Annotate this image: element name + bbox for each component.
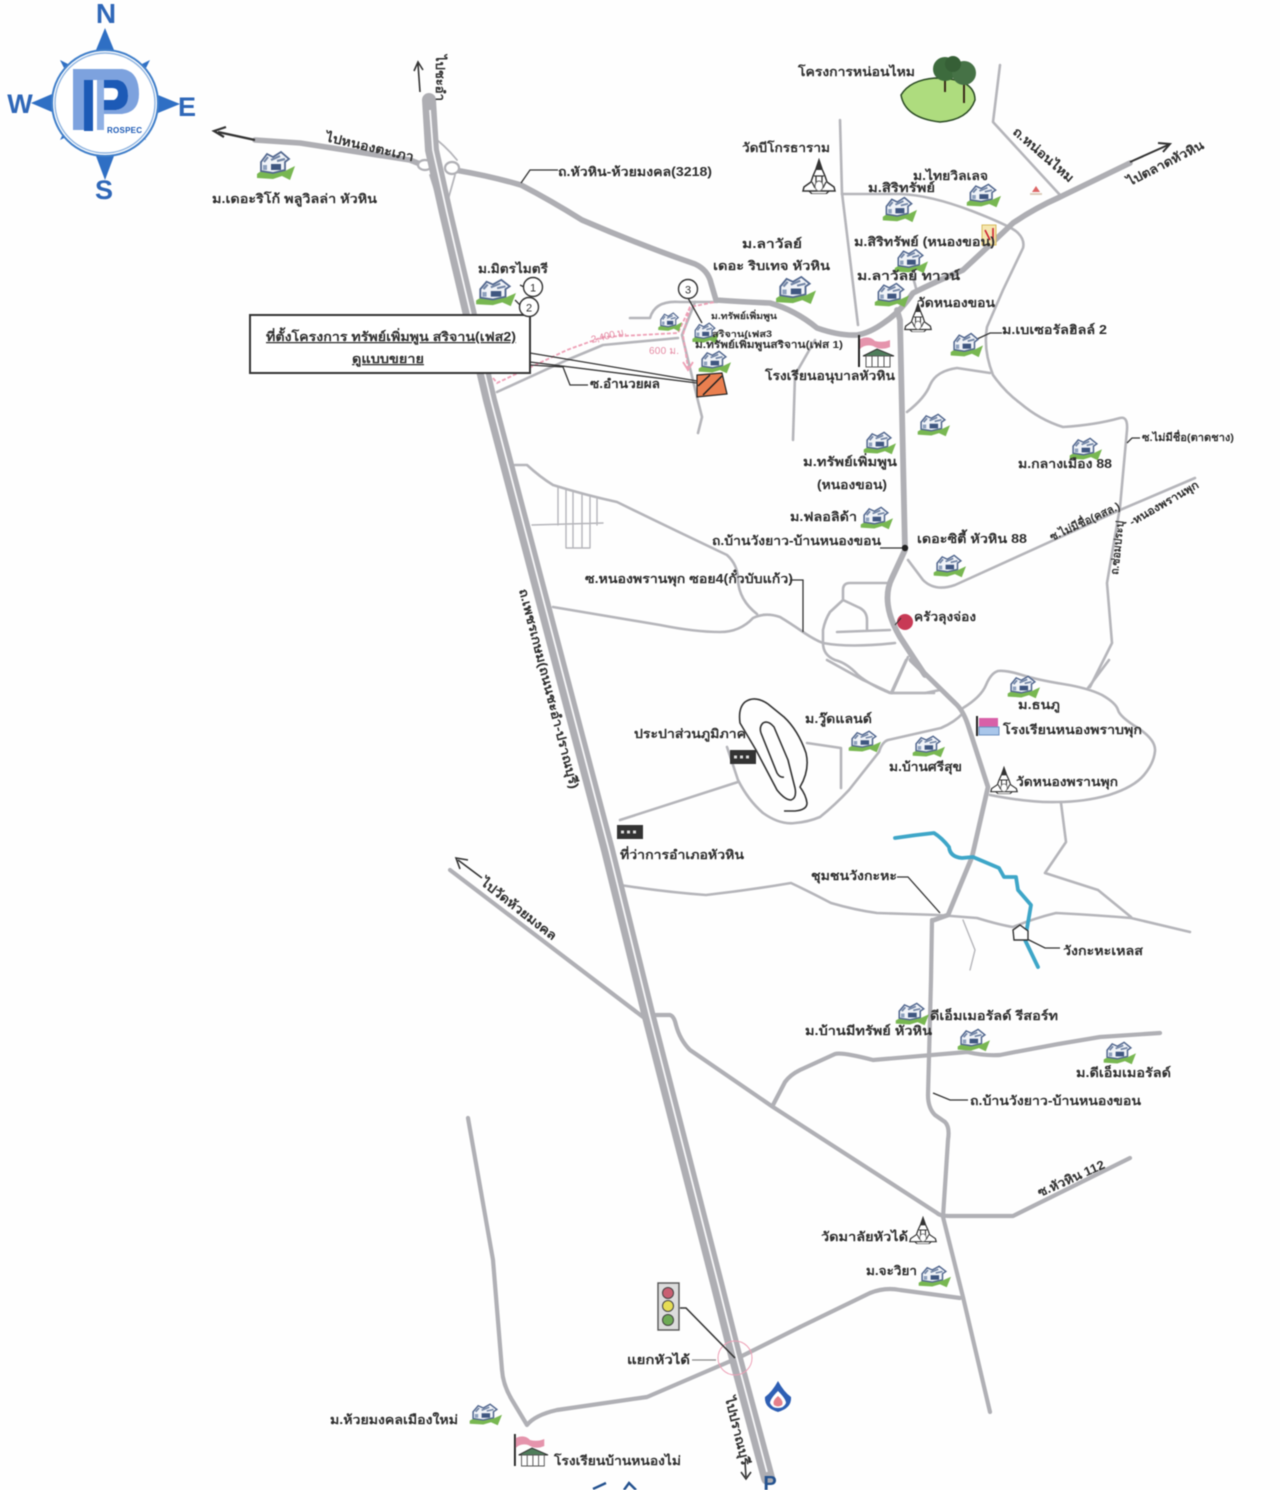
labels: centre: ม.วู๊ดแลนด์ <box>805 711 872 727</box>
labels: centre: ถ.เพชรเกษม(ถนนชะอำ-ปราณบุรี) <box>515 587 581 790</box>
labels: centre: โรงเรียนหนองพราบพุก <box>1002 722 1142 738</box>
labels: south: ไปปราณบุรี <box>721 1393 754 1467</box>
labels: north: ไปตลาดหัวหิน <box>1123 137 1207 190</box>
small landmarks <box>895 186 1042 940</box>
labels: project area <box>590 309 895 391</box>
labels: north: ไปหนองตะเภา <box>322 129 415 164</box>
labels: north: ม.เบเซอรัลฮิลล์ 2 <box>1002 322 1107 337</box>
labels: north: ม.เดอะริโก้ พลูวิลล่า หัวหิน <box>212 191 378 207</box>
project callout box: ดูแบบขยาย <box>352 352 424 367</box>
labels: north: ม.ลาวัลย์ ทาวน์ <box>857 268 961 283</box>
school icons <box>515 335 999 1466</box>
junction dot <box>902 545 908 551</box>
labels: centre: ถ.ซ่อมประปุ <box>1108 520 1128 575</box>
compass letters: S <box>95 175 113 205</box>
labels: centre: ม.บ้านศรีสุข <box>889 760 962 775</box>
icon: pond and trees <box>901 56 976 122</box>
main arterial <box>255 140 1130 335</box>
labels: centre: ม.ฟลอลิด้า <box>790 510 857 524</box>
labels: centre: เดอะซิตี้ หัวหิน 88 <box>917 529 1027 546</box>
labels: project area: ซ.อำนวยผล <box>590 377 660 391</box>
labels: south: วัดมาลัยหัวได้ <box>821 1229 908 1244</box>
labels: north: เดอะ ริบเทจ หัวหิน <box>713 259 831 273</box>
labels: centre: ครัวลุงจ่อง <box>914 610 976 625</box>
labels: south: ม.จะวิยา <box>866 1264 917 1278</box>
compass letters: ROSPEC <box>107 126 142 135</box>
numbered markers: 2 <box>526 302 532 314</box>
labels: north: วัดหนองขอน <box>917 296 995 310</box>
highway dual carriageway <box>429 100 768 1478</box>
labels: north: ม.มิตรไมตรี <box>478 261 548 276</box>
labels: south: โรงเรียนบ้านหนองไม่ <box>553 1453 681 1468</box>
labels: project area: 600 ม. <box>649 346 679 357</box>
icon: PTT flame <box>765 1381 791 1412</box>
labels: project area: 2,400 ม. <box>590 327 628 346</box>
leader lines <box>515 170 1140 1360</box>
labels: south: ม.บ้านมีทรัพย์ หัวหิน <box>805 1023 933 1038</box>
labels: north: ม.สิริทรัพย์ (หนองขอน) <box>854 234 995 249</box>
labels: north: ถ.หัวหิน-ห้วยมงคล(3218) <box>558 165 712 179</box>
labels: centre: ถ.บ้านวังยาว-บ้านหนองขอน <box>712 534 881 548</box>
labels: south: ชุมชนวังกะหะ <box>811 869 897 884</box>
river <box>895 833 1038 967</box>
labels: south: ซ.หัวหิน 112 <box>1036 1158 1107 1200</box>
labels: south: ม.ดีเอ็มเมอรัลด์ <box>1076 1065 1171 1080</box>
labels: south: ถ.บ้านวังยาว-บ้านหนองขอน <box>970 1094 1142 1108</box>
labels: project area: โรงเรียนอนุบาลหัวหิน <box>764 368 895 384</box>
labels: south <box>330 869 1171 1468</box>
pink route <box>493 302 752 1375</box>
project site <box>697 373 727 397</box>
labels: south: ดีเอ็มเมอรัลด์ รีสอร์ท <box>930 1008 1058 1023</box>
labels: centre: วัดหนองพรานพุก <box>1016 775 1118 790</box>
icon: Nong Phran Phuk school <box>977 716 999 736</box>
labels: north: ม.สิริทรัพย์ <box>868 180 935 195</box>
black reservoir track <box>740 699 807 811</box>
labels: north: ถ.หน่อนไหม <box>1010 124 1077 185</box>
labels: south: ม.ห้วยมงคลเมืองใหม่ <box>330 1412 458 1427</box>
labels: centre: ซ.ไม่มีชื่อ(ตาดชาง) <box>1142 429 1234 444</box>
labels: centre <box>515 429 1234 862</box>
road network <box>255 65 1195 1478</box>
numbered markers <box>520 278 698 316</box>
labels: south: วังกะหะเหลส <box>1063 944 1143 958</box>
labels: south: แยกหัวได้ <box>627 1352 690 1367</box>
compass letters <box>7 0 196 205</box>
temple icons <box>803 160 1017 1244</box>
labels: project area: ม.ทรัพย์เพิ่มพูน <box>711 309 778 322</box>
project callout box: ที่ตั้งโครงการ ทรัพย์เพิ่มพูน สริจาน(เฟส2) <box>266 327 516 345</box>
labels: centre: ซ.ไม่มีชื่อ(คสล.) <box>1047 498 1122 544</box>
icon: traffic light <box>658 1283 679 1330</box>
labels: centre: ม.ทรัพย์เพิ่มพูน <box>803 453 898 470</box>
labels: centre: ม.กลางเมือง 88 <box>1018 457 1112 471</box>
village icons <box>257 152 1136 1425</box>
labels: centre: ซ.หนองพรานพุก ซอย4(กั๋วบับแก้ว) <box>585 569 793 587</box>
numbered markers: 1 <box>530 282 536 294</box>
labels: north <box>212 53 1207 337</box>
labels: project area: ม.ทรัพย์เพิ่มพูนสริจาน(เฟส 1) <box>695 337 843 352</box>
medium roads <box>450 310 1160 1425</box>
compass letters: W <box>7 89 33 119</box>
roundabouts <box>418 160 459 174</box>
labels: south: ไปวัดห้วยมงคล <box>476 873 560 943</box>
numbered markers: 3 <box>685 284 691 296</box>
project callout box <box>250 315 530 373</box>
labels: centre: -หนองพรานพุก <box>1128 479 1202 529</box>
labels: centre: (หนองขอน) <box>817 478 887 492</box>
labels: project area: สริจาน(เฟส3 <box>712 329 772 339</box>
bottom marks <box>593 1473 777 1490</box>
labels: centre: ที่ว่าการอำเภอหัวหิน <box>620 846 745 862</box>
labels: centre: ม.ธนภู <box>1018 698 1060 713</box>
compass letters: E <box>178 92 196 122</box>
office icons <box>617 750 756 839</box>
labels: north: ไปชะอำ <box>433 53 448 101</box>
thin local roads <box>428 65 1195 970</box>
compass logo <box>7 0 196 205</box>
labels: north: ม.ไทยวิลเลจ <box>913 168 988 183</box>
labels: centre: ประปาส่วนภูมิภาค <box>634 727 746 742</box>
labels: north: โครงการหน่อนไหม <box>797 64 915 79</box>
direction arrows <box>214 62 1170 1479</box>
labels: north: วัดบีโกรธาราม <box>742 140 830 155</box>
labels: north: ม.ลาวัลย์ <box>742 236 802 251</box>
